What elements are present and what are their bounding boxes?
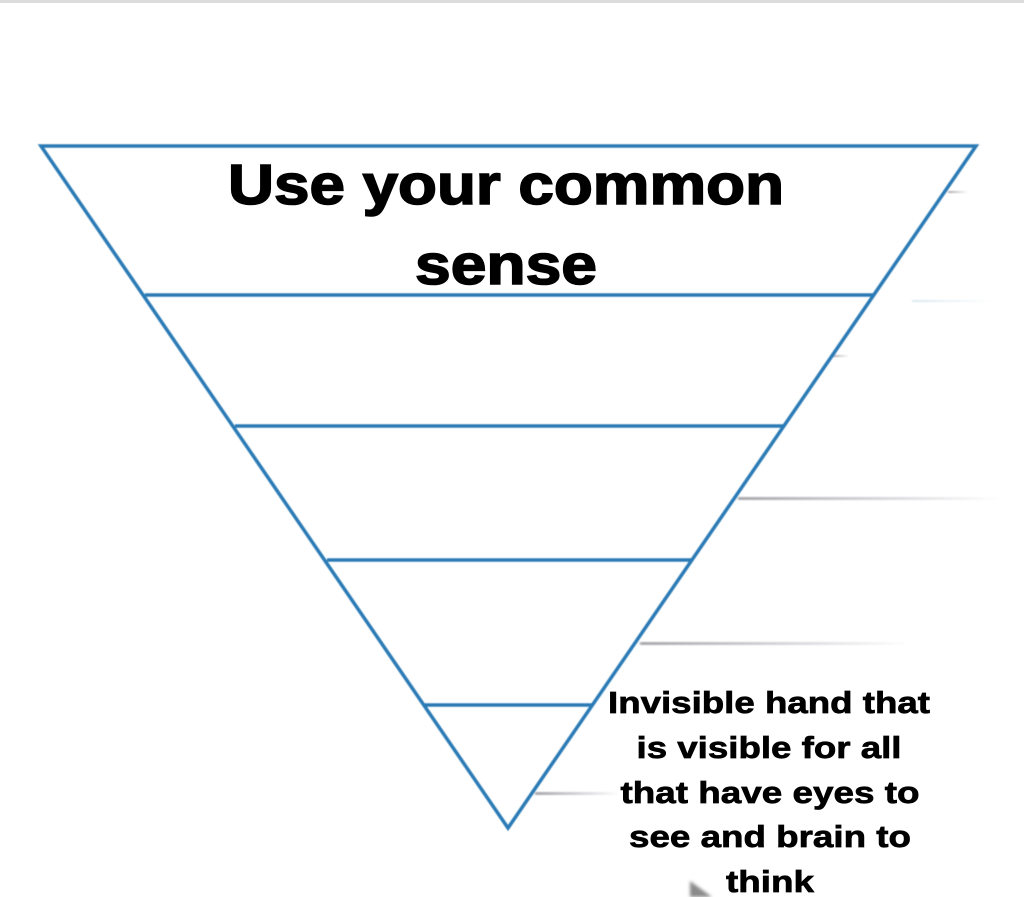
heading: top pyramid tier: Use your common bbox=[228, 153, 784, 217]
icon: pointer fragment bbox=[690, 881, 712, 897]
callout: invisible hand: is visible for all bbox=[636, 730, 902, 765]
callout: invisible hand bbox=[608, 685, 930, 897]
heading: top pyramid tier bbox=[228, 153, 784, 297]
inverted pyramid bbox=[41, 146, 976, 828]
heading: top pyramid tier: sense bbox=[415, 233, 597, 297]
callout: invisible hand: Invisible hand that bbox=[608, 685, 930, 720]
callout: invisible hand: see and brain to bbox=[629, 819, 911, 854]
callout: invisible hand: that have eyes to bbox=[620, 775, 920, 810]
